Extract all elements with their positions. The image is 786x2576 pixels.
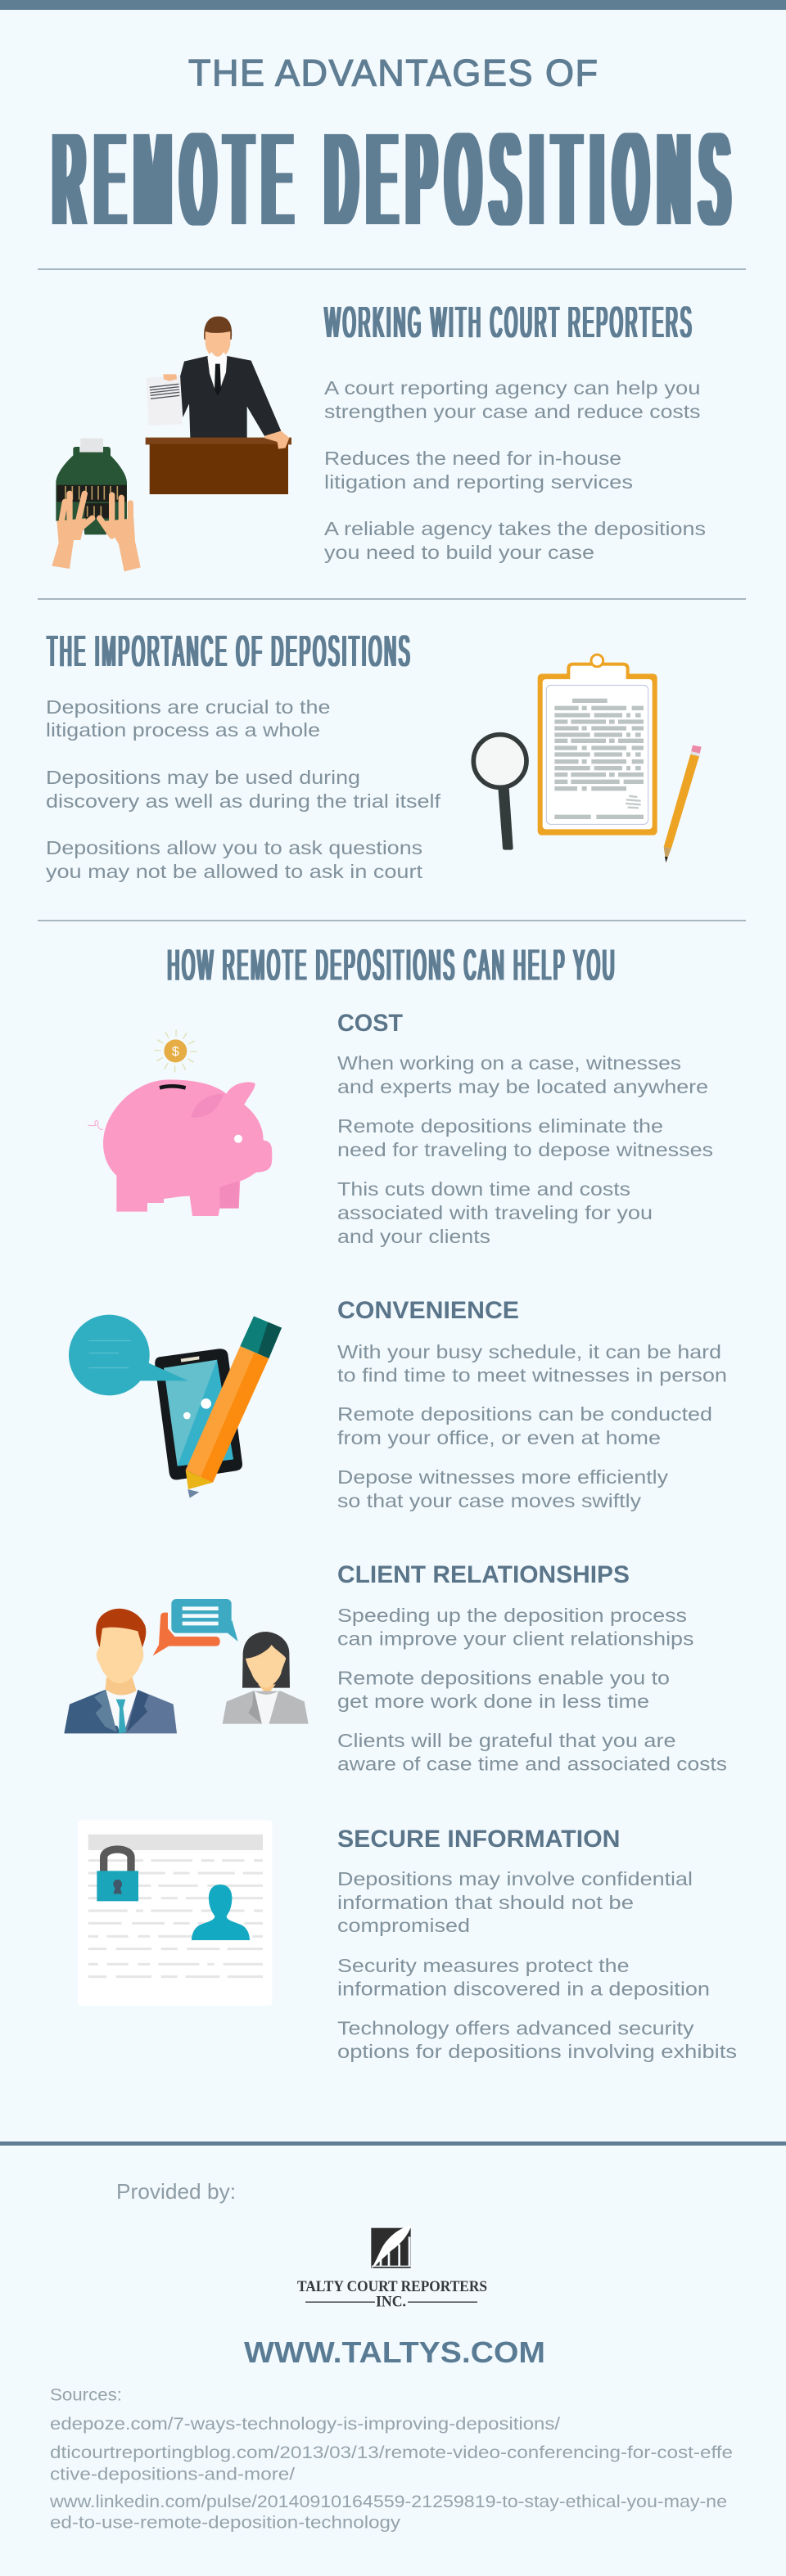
text block: litigation and reporting services: [324, 471, 633, 493]
icon: quill and bars: [371, 2225, 412, 2269]
icon: lawyer and client talking: [64, 1599, 309, 1733]
sources: www.linkedin.com/pulse/20140910164559-21259819-to-stay-ethical-you-may-ne: [49, 2493, 727, 2511]
text block: Depositions allow you to ask questions: [46, 837, 422, 858]
text block: you need to build your case: [324, 542, 594, 563]
heading: CONVENIENCE: [337, 1297, 519, 1324]
panel: client relationships: [64, 1561, 727, 1774]
panel: working with court reporters: [52, 298, 706, 571]
panel: secure information: [78, 1820, 737, 2062]
icon: clipboard, magnifier and pencil: [473, 655, 702, 862]
logo: Talty Court Reporters: TALTY COURT REPORTERS: [297, 2278, 487, 2295]
title line 1: THE ADVANTAGES OF: [188, 52, 598, 93]
text block: This cuts down time and costs: [337, 1178, 630, 1200]
text block: compromised: [337, 1915, 470, 1936]
text block: When working on a case, witnesses: [337, 1052, 681, 1074]
text block: Clients will be grateful that you are: [337, 1730, 676, 1751]
text block: need for traveling to depose witnesses: [337, 1139, 713, 1160]
icon: piggy bank and coin: $: [172, 1045, 179, 1059]
text block: Depositions are crucial to the: [46, 696, 331, 718]
text block: Remote depositions eliminate the: [337, 1115, 663, 1137]
text block: A reliable agency takes the depositions: [324, 518, 706, 539]
sources: edepoze.com/7-ways-technology-is-improving-depositions/: [50, 2415, 560, 2434]
text block: [337, 1052, 713, 1247]
text block: information discovered in a deposition: [337, 1979, 710, 2000]
panel: the importance of depositions: [46, 627, 702, 882]
text block: Depose witnesses more efficiently: [337, 1466, 669, 1488]
text block: information that should not be: [337, 1892, 634, 1913]
text block: [337, 1605, 727, 1774]
text block: Reduces the need for in-house: [324, 448, 621, 469]
sources: Sources:: [50, 2386, 122, 2404]
text block: so that your case moves swiftly: [337, 1490, 642, 1511]
website: WWW.TALTYS.COM: [244, 2335, 545, 2369]
logo: Talty Court Reporters: [297, 2225, 487, 2311]
text block: from your office, or even at home: [337, 1427, 661, 1448]
text block: you may not be allowed to ask in court: [46, 861, 423, 882]
footer rule: [0, 2141, 786, 2146]
footer: provided by: [49, 2179, 733, 2532]
text block: Remote depositions can be conducted: [337, 1403, 712, 1425]
heading: CLIENT RELATIONSHIPS: [337, 1561, 630, 1588]
text block: litigation process as a whole: [46, 719, 320, 741]
text block: and your clients: [337, 1226, 490, 1247]
text block: options for depositions involving exhibits: [337, 2041, 737, 2062]
text block: discovery as well as during the trial itself: [46, 790, 441, 812]
icon: phone, speech bubble and pencil: [69, 1315, 282, 1498]
top bar: [0, 0, 786, 10]
sources: dticourtreportingblog.com/2013/03/13/remote-video-conferencing-for-cost-effe: [50, 2443, 733, 2462]
panel: convenience: [69, 1297, 727, 1511]
text block: to find time to meet witnesses in person: [337, 1365, 727, 1386]
text block: With your busy schedule, it can be hard: [337, 1341, 721, 1362]
text block: A court reporting agency can help you: [324, 377, 701, 399]
heading: COST: [337, 1010, 403, 1037]
provided by label: Provided by:: [116, 2179, 236, 2204]
title: [54, 52, 740, 252]
text block: aware of case time and associated costs: [337, 1753, 727, 1774]
text block: Depositions may involve confidential: [337, 1868, 693, 1889]
icon: court reporter and speaker at desk: [52, 317, 291, 571]
logo: Talty Court Reporters: INC.: [376, 2293, 406, 2311]
text block: Security measures protect the: [337, 1955, 629, 1976]
icon: piggy bank and coin: [88, 1034, 272, 1216]
text block: associated with traveling for you: [337, 1202, 653, 1223]
panel: cost: [88, 1010, 713, 1247]
text block: get more work done in less time: [337, 1691, 649, 1712]
text block: Remote depositions enable you to: [337, 1668, 670, 1689]
heading: SECURE INFORMATION: [337, 1826, 621, 1853]
text block: [337, 1868, 737, 2062]
text block: [46, 696, 441, 882]
text block: can improve your client relationships: [337, 1628, 694, 1650]
text block: [324, 377, 706, 563]
sources: ctive-depositions-and-more/: [50, 2465, 295, 2484]
sources: [49, 2386, 733, 2532]
text block: and experts may be located anywhere: [337, 1076, 708, 1097]
text block: strengthen your case and reduce costs: [324, 401, 701, 422]
text block: [337, 1341, 727, 1511]
text block: Depositions may be used during: [46, 767, 360, 788]
sources: ed-to-use-remote-deposition-technology: [50, 2514, 401, 2532]
icon: document, padlock and person: [78, 1820, 272, 2006]
text block: Speeding up the deposition process: [337, 1605, 687, 1626]
text block: Technology offers advanced security: [337, 2018, 694, 2039]
